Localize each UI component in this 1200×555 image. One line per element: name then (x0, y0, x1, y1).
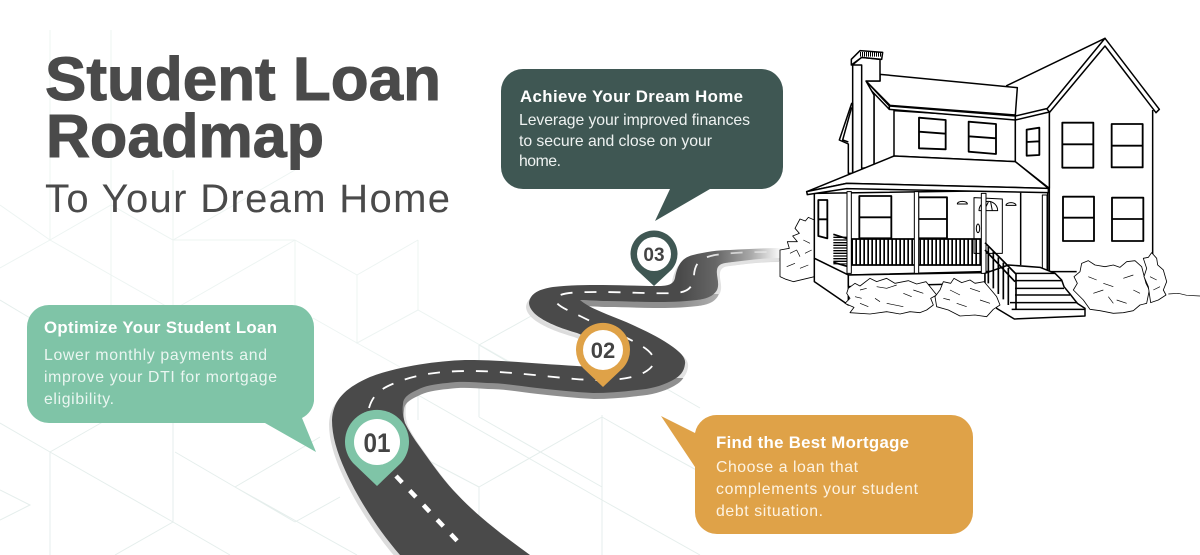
callout: step 3 achieve your dream home: to secure and close on your (519, 133, 712, 150)
callout: step 3 achieve your dream home (501, 69, 783, 221)
house: chimney (852, 57, 880, 168)
house: bush front middle (935, 278, 1000, 317)
callout: step 3 achieve your dream home: home. (519, 153, 561, 170)
house illustration (780, 38, 1200, 319)
road centre dashes, winding section (369, 252, 780, 408)
house: right wing wall and gable (1049, 46, 1153, 272)
callout: step 2 find the best mortgage (661, 415, 973, 534)
callout: step 3 achieve your dream home: Leverage your improved finances (519, 112, 750, 129)
house: main roof back (1007, 38, 1105, 117)
house: upper windows (919, 118, 1143, 241)
house: base (814, 258, 848, 305)
callout: step 1 optimize your student loan: eligibility. (44, 391, 114, 408)
title line: Roadmap: Roadmap (46, 102, 324, 170)
callout: step 1 optimize your student loan (27, 305, 316, 452)
title (45, 45, 450, 221)
house: upper left wall (862, 90, 894, 163)
house: stair rail (985, 243, 1016, 310)
title line: Student Loan: Student Loan (45, 45, 441, 113)
callout: step 2 find the best mortgage: Choose a loan that (716, 459, 859, 476)
house: ground line (1168, 293, 1200, 296)
house: door and lamps (957, 198, 1016, 253)
road centre dashes, wide lower section (396, 476, 462, 546)
house: bush right (1073, 261, 1149, 313)
subtitle: To Your Dream Home (45, 177, 450, 221)
house: bush far left (780, 217, 814, 282)
house: upper roof (866, 74, 1017, 115)
map pin 02: 02 (591, 338, 615, 363)
callout: step 2 find the best mortgage: debt situation. (716, 503, 823, 520)
house: porch railing (851, 213, 982, 291)
callout: step 1 optimize your student loan: Optimize Your Student Loan (44, 318, 277, 337)
map pin 03 (630, 231, 678, 286)
winding road (329, 248, 785, 555)
map pin 01 (345, 410, 409, 486)
house: bush front left (845, 278, 937, 314)
callout: step 1 optimize your student loan: Lower monthly payments and (44, 347, 267, 364)
house: porch columns (847, 192, 1047, 273)
house: upper floor wall (894, 111, 1015, 162)
house: ground floor windows (818, 196, 947, 238)
house: porch roof (807, 156, 1048, 192)
house: bush small right (1143, 253, 1167, 303)
map pin 01: 01 (364, 428, 390, 458)
map pin 02 (576, 323, 630, 387)
house: dormer side (839, 103, 853, 173)
callout: step 3 achieve your dream home: Achieve Your Dream Home (520, 87, 743, 106)
callout: step 2 find the best mortgage: Find the Best Mortgage (716, 433, 909, 452)
callout: step 1 optimize your student loan: improve your DTI for mortgage (44, 369, 277, 386)
house: steps (985, 265, 1085, 319)
house: porch wall (814, 190, 1048, 275)
callout: step 2 find the best mortgage: complements your student (716, 481, 919, 498)
map pin 03: 03 (643, 245, 665, 266)
